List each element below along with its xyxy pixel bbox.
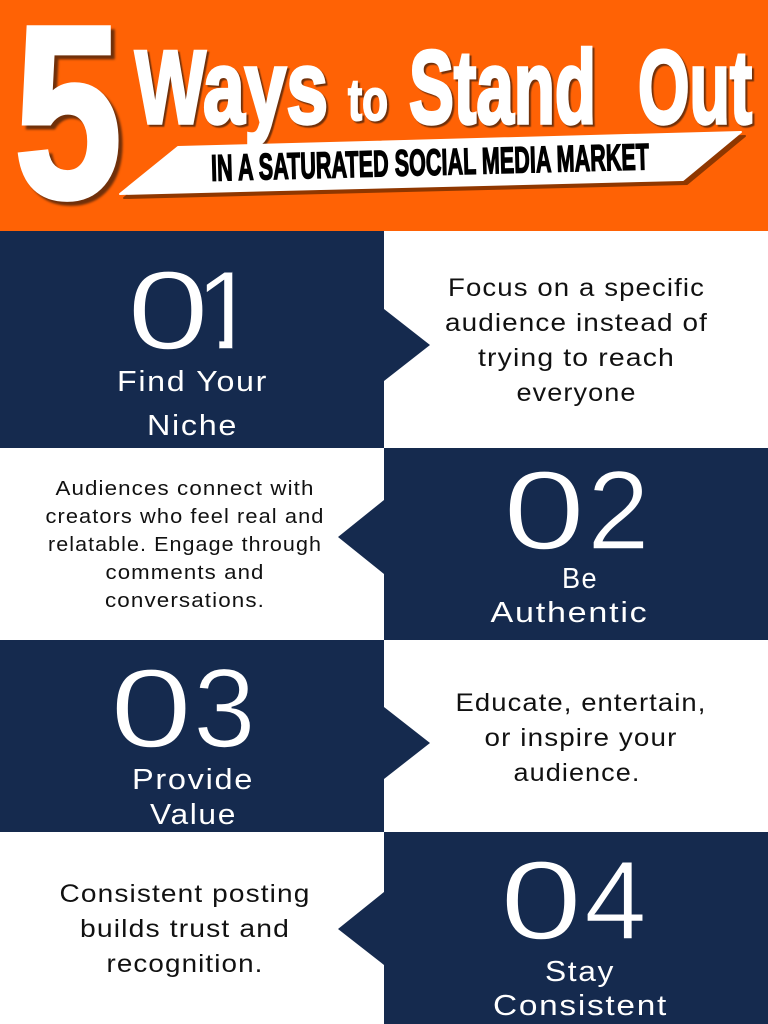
step 3 description: audience. (514, 759, 640, 787)
step 1 description: audience instead of (445, 309, 708, 337)
step 2 label (490, 563, 648, 629)
step 3 label: Provide (132, 764, 254, 796)
step 2 description: comments and (106, 562, 264, 584)
step 1 description: trying to reach (478, 344, 675, 372)
title (135, 30, 752, 146)
step 3 description (456, 689, 706, 787)
step 2 number: 0 (503, 448, 585, 573)
step 4 description: Consistent posting (60, 880, 310, 908)
step 4 number: 4 (584, 838, 647, 963)
step 3 number: 0 (110, 646, 192, 771)
step 4 label: Consistent (493, 990, 668, 1022)
step 1 label (117, 366, 268, 442)
step 2 number: 2 (587, 448, 650, 573)
step 1 number: 1 (195, 248, 258, 373)
step 2 description (46, 478, 324, 612)
step 1 description: Focus on a specific (448, 274, 705, 302)
step 4 label (493, 956, 668, 1022)
title: to (348, 68, 388, 133)
step 1 description (445, 274, 708, 407)
step 3 label (132, 764, 254, 831)
step 4 description: recognition. (106, 950, 264, 978)
step 3 number: 3 (193, 646, 256, 771)
panel: step 1 background and arrow (0, 231, 430, 448)
step 2 number (503, 448, 650, 573)
title: Ways (135, 30, 328, 146)
step 2 description: conversations. (105, 590, 265, 612)
title: Stand (409, 30, 596, 146)
header background (0, 0, 768, 231)
step 4 description (60, 880, 310, 978)
step 4 number (500, 838, 647, 963)
step 4 description: builds trust and (80, 915, 290, 943)
step 3 description: Educate, entertain, (456, 689, 706, 717)
step 3 label: Value (150, 799, 237, 831)
step 3 number (110, 646, 256, 771)
panel: step 2 background and arrow (338, 448, 768, 640)
step 2 description: creators who feel real and (46, 506, 324, 528)
step 1 label: Niche (147, 410, 238, 442)
step 4 number: 0 (500, 838, 582, 963)
step 4 label: Stay (545, 956, 615, 988)
step 1 description: everyone (516, 379, 636, 407)
step 2 description: relatable. Engage through (48, 534, 322, 556)
step 2 label: Be (562, 563, 598, 595)
step 3 description: or inspire your (484, 724, 678, 752)
step 1 number: 0 (127, 248, 209, 373)
step 2 label: Authentic (490, 597, 648, 629)
panel: step 3 background and arrow (0, 640, 430, 832)
panel: step 4 background and arrow (338, 832, 768, 1024)
step 2 description: Audiences connect with (56, 478, 314, 500)
step 1 label: Find Your (117, 366, 268, 398)
